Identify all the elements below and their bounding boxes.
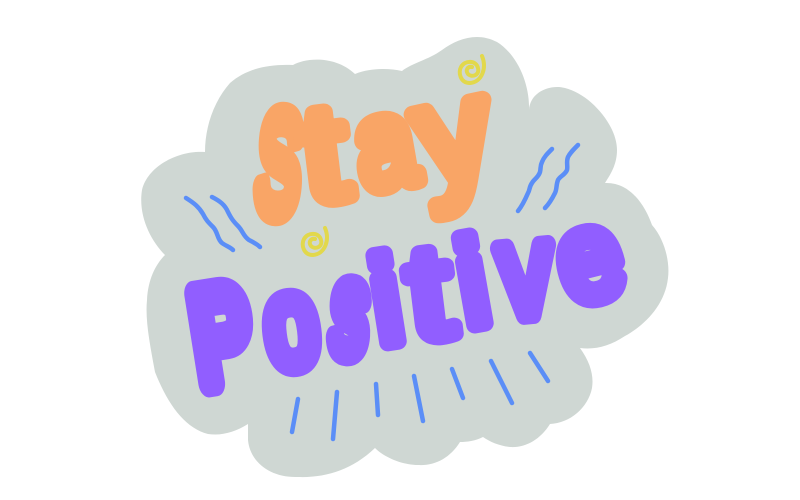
radiating lines xyxy=(292,353,548,439)
heading: Stay: y xyxy=(401,49,505,217)
squiggles: right xyxy=(518,145,578,211)
grey cloud sticker background xyxy=(141,37,668,477)
heading: Positive: s xyxy=(327,237,373,384)
heading: Positive: i xyxy=(448,213,498,352)
squiggles: left xyxy=(186,197,260,250)
heading: Positive: P xyxy=(182,260,262,412)
heading: Positive: v xyxy=(493,195,557,345)
heading: Stay: t xyxy=(294,75,355,230)
heading: Stay: a xyxy=(345,72,425,215)
heading: Positive: e xyxy=(543,183,635,330)
heading: Positive: i xyxy=(362,231,410,370)
spiral: top xyxy=(460,56,484,83)
heading: Stay: S xyxy=(251,85,307,245)
heading: Positive xyxy=(182,183,635,412)
spiral: lower xyxy=(303,228,327,255)
heading: Stay xyxy=(251,49,505,245)
heading: Positive: o xyxy=(257,251,325,395)
heading: Positive: t xyxy=(400,217,459,368)
